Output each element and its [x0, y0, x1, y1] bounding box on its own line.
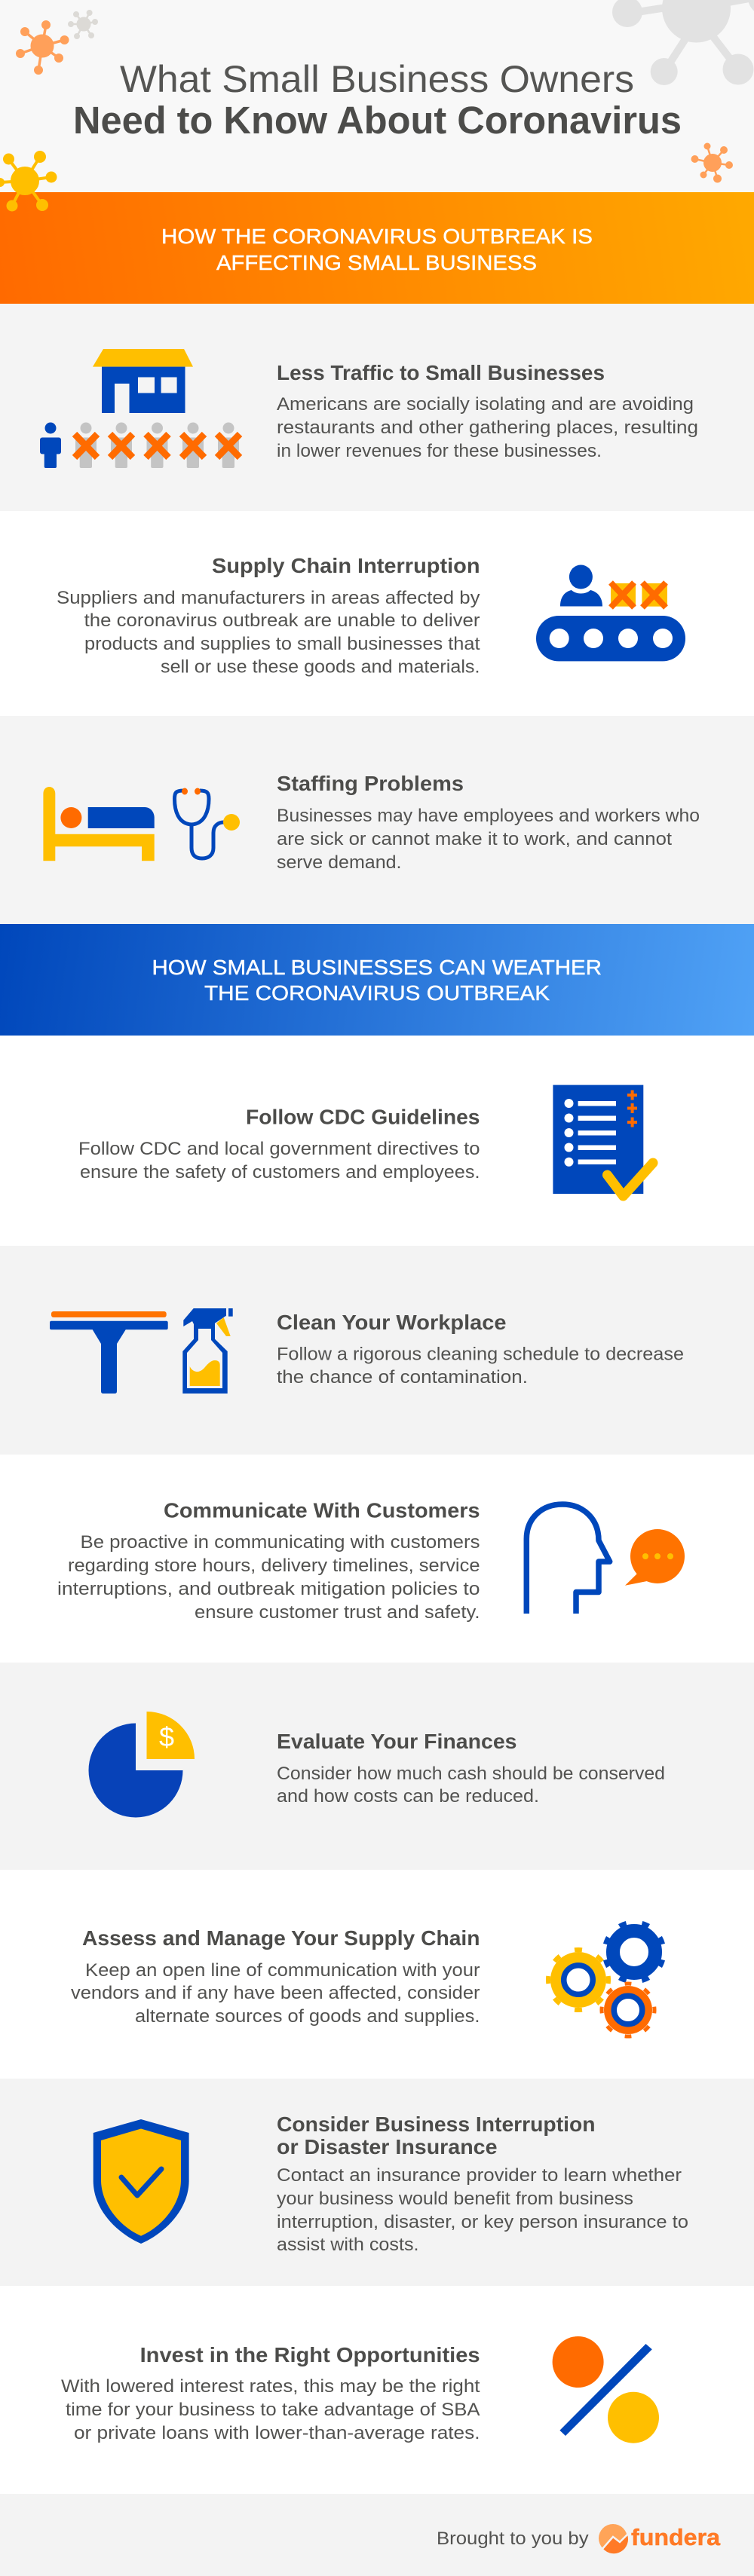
body text: Americans are socially isolating and are avoiding — [277, 394, 694, 415]
body text: ensure the safety of customers and employees. — [80, 1162, 480, 1182]
body text: Businesses may have employees and workers who — [277, 806, 700, 826]
body text: or private loans with lower-than-average rates. — [74, 2423, 480, 2443]
body text: Follow a rigorous cleaning schedule to decrease — [277, 1345, 684, 1364]
body text — [277, 2165, 688, 2255]
body text — [277, 806, 700, 873]
body text: Contact an insurance provider to learn whether — [277, 2165, 682, 2186]
panel: assess and manage supply chain — [0, 1870, 754, 2079]
panel: less traffic — [0, 304, 754, 511]
panel: invest in the right opportunities — [0, 2286, 754, 2494]
icon: conveyor belt — [536, 565, 685, 661]
banner: how the outbreak is affecting small business — [0, 192, 754, 304]
logo: fundera: fundera — [631, 2524, 721, 2550]
virus: small orange right — [691, 143, 733, 182]
panel: supply chain interruption — [0, 511, 754, 716]
body text: serve demand. — [277, 852, 401, 873]
icon: pie chart with dollar: $ — [159, 1721, 174, 1752]
virus: grey top left — [68, 11, 98, 39]
heading: Clean Your Workplace — [277, 1311, 507, 1334]
body text — [57, 588, 480, 677]
body text: Follow CDC and local government directives to — [78, 1139, 480, 1159]
heading: or Disaster Insurance — [277, 2135, 498, 2158]
body text: in lower revenues for these businesses. — [277, 441, 602, 461]
body text: regarding store hours, delivery timelines, service — [68, 1556, 480, 1576]
title — [73, 58, 682, 142]
body text — [78, 1139, 480, 1182]
icon: percent sign — [553, 2336, 659, 2443]
body text — [277, 394, 698, 461]
body text: assist with costs. — [277, 2235, 419, 2255]
body text: Suppliers and manufacturers in areas affected by — [57, 588, 480, 608]
icon: head outline — [526, 1504, 610, 1614]
body text — [71, 1960, 480, 2027]
panel: business interruption insurance — [0, 2079, 754, 2286]
panel: follow cdc guidelines — [0, 1036, 754, 1246]
virus: large grey top right — [612, 0, 754, 85]
icon: gears — [548, 1913, 673, 2036]
icon: stethoscope — [175, 788, 240, 858]
body text: alternate sources of goods and supplies. — [135, 2006, 480, 2027]
icon: shield — [93, 2119, 189, 2244]
banner: how small businesses can weather the outbreak: THE CORONAVIRUS OUTBREAK — [204, 981, 550, 1005]
icon: hospital bed — [43, 787, 155, 861]
logo: fundera — [599, 2524, 721, 2553]
body text — [61, 2376, 480, 2443]
icon: spray bottle — [182, 1308, 233, 1394]
banner: how small businesses can weather the outbreak — [0, 924, 754, 1036]
title: Need to Know About Coronavirus — [73, 99, 682, 142]
footer — [0, 2494, 754, 2576]
brought to you by: Brought to you by — [437, 2529, 589, 2549]
panel: communicate with customers — [0, 1455, 754, 1663]
banner: how the outbreak is affecting small business: AFFECTING SMALL BUSINESS — [216, 251, 537, 274]
body text: restaurants and other gathering places, resulting — [277, 418, 698, 438]
body text: products and supplies to small businesses that — [84, 634, 480, 654]
heading: Communicate With Customers — [164, 1498, 480, 1522]
body text: Consider how much cash should be conserved — [277, 1764, 665, 1784]
body text: interruption, disaster, or key person insurance to — [277, 2212, 688, 2232]
heading: Invest in the Right Opportunities — [140, 2343, 480, 2366]
virus: orange top left — [17, 21, 69, 74]
body text: the chance of contamination. — [277, 1367, 528, 1387]
body text: interruptions, and outbreak mitigation policies to — [57, 1579, 480, 1599]
body text: the coronavirus outbreak are unable to deliver — [84, 610, 480, 631]
body text: and how costs can be reduced. — [277, 1786, 539, 1807]
body text — [277, 1345, 684, 1387]
icon: store with people — [40, 349, 240, 468]
panel: clean your workplace — [0, 1246, 754, 1455]
panel: evaluate your finances — [0, 1663, 754, 1870]
body text: Keep an open line of communication with your — [85, 1960, 480, 1981]
heading: Evaluate Your Finances — [277, 1730, 517, 1753]
banner: how small businesses can weather the outbreak: HOW SMALL BUSINESSES CAN WEATHER — [152, 956, 602, 979]
icon: checklist — [553, 1085, 653, 1196]
body text — [57, 1532, 480, 1623]
body text: ensure customer trust and safety. — [195, 1602, 480, 1623]
body text — [277, 1764, 665, 1807]
heading: Less Traffic to Small Businesses — [277, 361, 605, 384]
heading: Staffing Problems — [277, 772, 464, 795]
body text: With lowered interest rates, this may be the right — [61, 2376, 480, 2397]
body text: vendors and if any have been affected, consider — [71, 1983, 480, 2003]
heading: Follow CDC Guidelines — [246, 1105, 480, 1129]
virus: yellow overlapping banner — [0, 151, 57, 211]
icon: speech bubble — [625, 1529, 685, 1586]
title: What Small Business Owners — [120, 58, 634, 100]
body text: time for your business to take advantage of SBA — [66, 2400, 480, 2420]
body text: Be proactive in communicating with customers — [80, 1532, 480, 1553]
heading — [277, 2113, 596, 2158]
heading: Consider Business Interruption — [277, 2113, 596, 2136]
heading: Supply Chain Interruption — [212, 554, 480, 577]
icon: squeegee — [50, 1311, 168, 1394]
body text: sell or use these goods and materials. — [161, 657, 480, 677]
banner: how the outbreak is affecting small business: HOW THE CORONAVIRUS OUTBREAK IS — [161, 225, 593, 248]
panel: staffing problems — [0, 716, 754, 924]
header — [0, 0, 754, 192]
body text: your business would benefit from business — [277, 2189, 633, 2209]
icon: pie chart with dollar — [89, 1712, 195, 1818]
heading: Assess and Manage Your Supply Chain — [82, 1926, 480, 1950]
body text: are sick or cannot make it to work, and cannot — [277, 829, 672, 849]
